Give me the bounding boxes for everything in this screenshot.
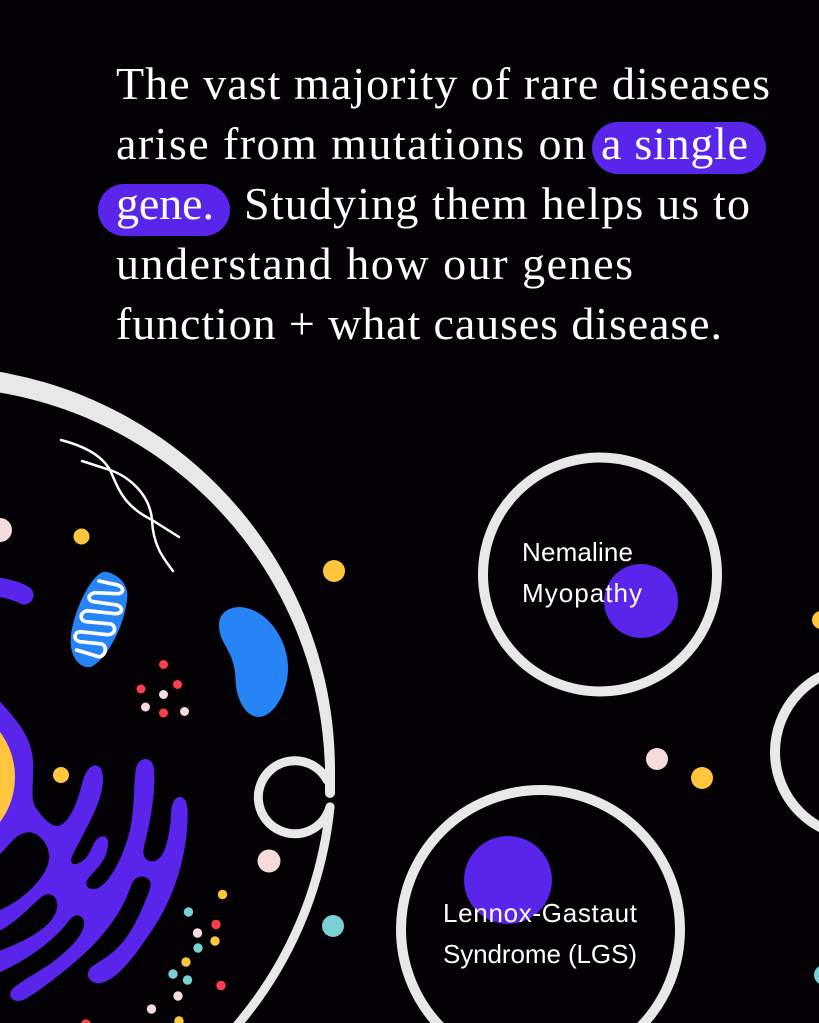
yellow floating dot bbox=[691, 767, 713, 789]
highlight pill: gene bbox=[98, 184, 230, 236]
yellow dot at right edge bbox=[812, 611, 819, 629]
red and pink particle cluster bbox=[136, 660, 189, 718]
golgi apparatus bbox=[0, 702, 188, 1001]
yellow dot near nucleus bbox=[53, 767, 69, 783]
label: Nemaline: Nemaline bbox=[522, 537, 633, 567]
mixed particle cluster bbox=[81, 890, 227, 1023]
disease circle: Nemaline Myopathy bbox=[483, 458, 717, 692]
highlight pill: a single bbox=[592, 122, 766, 174]
pink dot inside cell bbox=[258, 850, 280, 872]
gene dot bbox=[604, 564, 678, 638]
mitochondrion cristae bbox=[75, 581, 123, 657]
cell membrane upper arc bbox=[0, 366, 335, 798]
pink dot at left edge bbox=[0, 518, 12, 542]
label: Lennox-Gastaut: Lennox-Gastaut bbox=[443, 898, 638, 928]
vesicle budding from membrane bbox=[258, 761, 330, 834]
label: Syndrome (LGS): Syndrome (LGS) bbox=[443, 939, 637, 969]
pink floating dot bbox=[646, 748, 668, 770]
heading line 5: function + what causes disease. bbox=[116, 298, 722, 349]
outer ring bbox=[483, 458, 717, 692]
heading text block bbox=[98, 58, 770, 349]
highlighted words: a single: a single bbox=[601, 118, 748, 169]
strand one bbox=[61, 440, 179, 537]
yellow dot outside cell bbox=[323, 560, 345, 582]
mitochondrion body bbox=[71, 572, 127, 667]
disease circle: Lennox-Gastaut Syndrome bbox=[401, 790, 680, 1023]
teal dot outside cell bbox=[322, 915, 344, 937]
yellow dot inside cell top bbox=[74, 528, 90, 544]
endoplasmic blue organelle bbox=[219, 607, 288, 717]
heading line 3: Studying them helps us to bbox=[244, 178, 750, 229]
nucleus bbox=[0, 702, 15, 852]
strand two bbox=[82, 461, 173, 571]
DNA strand bbox=[61, 440, 179, 571]
small particle dots group bbox=[0, 518, 280, 1023]
label: Myopathy: Myopathy bbox=[522, 578, 642, 608]
highlighted word: gene: gene. bbox=[116, 178, 214, 229]
heading line 4: understand how our genes bbox=[116, 238, 633, 289]
gene dot bbox=[464, 836, 552, 924]
heading line 1: The vast majority of rare diseases bbox=[116, 58, 770, 109]
teal dot at right edge bbox=[814, 965, 819, 985]
heading line 2: arise from mutations on bbox=[116, 118, 586, 169]
cell illustration bbox=[0, 366, 335, 1023]
mitochondrion bbox=[71, 572, 127, 667]
golgi fragment bbox=[0, 586, 24, 595]
partial circle at right edge bbox=[775, 667, 819, 837]
cell membrane lower arc bbox=[233, 807, 330, 1023]
outer ring bbox=[401, 790, 680, 1023]
